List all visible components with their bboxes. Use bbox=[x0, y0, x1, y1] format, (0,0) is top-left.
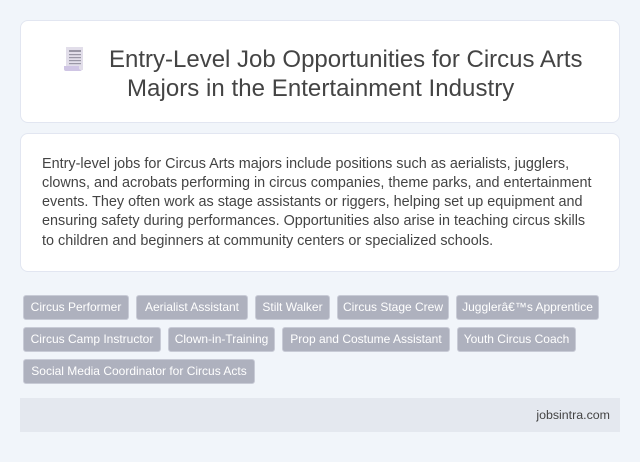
description text: to children and beginners at community centers or specialized schools. bbox=[42, 233, 493, 249]
icon: paper scroll bbox=[64, 47, 83, 71]
tag bbox=[255, 295, 330, 320]
description text: Entry-level jobs for Circus Arts majors include positions such as aerialists, jugglers, bbox=[42, 156, 569, 172]
tag: Clown-in-Training bbox=[175, 332, 268, 346]
tag: Circus Stage Crew bbox=[343, 300, 443, 314]
tag: Circus Camp Instructor bbox=[31, 332, 153, 346]
description text: events. They often work as stage assistants or riggers, helping set up equipment and bbox=[42, 194, 582, 210]
tag: Stilt Walker bbox=[262, 300, 323, 314]
tag bbox=[23, 295, 129, 320]
tag: Aerialist Assistant bbox=[145, 300, 239, 314]
panel: description bbox=[20, 133, 620, 272]
tag bbox=[23, 327, 161, 352]
title line 2: Majors in the Entertainment Industry bbox=[127, 75, 514, 102]
description text: ensuring safety during performances. Opportunities also arise in teaching circus skills bbox=[42, 213, 585, 229]
tag bbox=[282, 327, 450, 352]
tags: job titles bbox=[23, 295, 599, 384]
tag bbox=[136, 295, 248, 320]
footer credit: jobsintra.com bbox=[536, 408, 610, 422]
description text: clowns, and acrobats performing in circus companies, theme parks, and entertainment bbox=[42, 175, 592, 191]
tag bbox=[456, 295, 599, 320]
tag: Youth Circus Coach bbox=[464, 332, 569, 346]
tag: Jugglerâ€™s Apprentice bbox=[462, 300, 593, 314]
tag: Circus Performer bbox=[31, 300, 121, 314]
tag: Prop and Costume Assistant bbox=[290, 332, 442, 346]
tag bbox=[23, 359, 255, 384]
tag bbox=[168, 327, 275, 352]
tag bbox=[337, 295, 449, 320]
footer bar bbox=[20, 398, 620, 432]
tag bbox=[457, 327, 576, 352]
tag: Social Media Coordinator for Circus Acts bbox=[31, 364, 247, 378]
title line 1: Entry-Level Job Opportunities for Circus Arts bbox=[109, 46, 583, 73]
panel: header bbox=[20, 20, 620, 123]
